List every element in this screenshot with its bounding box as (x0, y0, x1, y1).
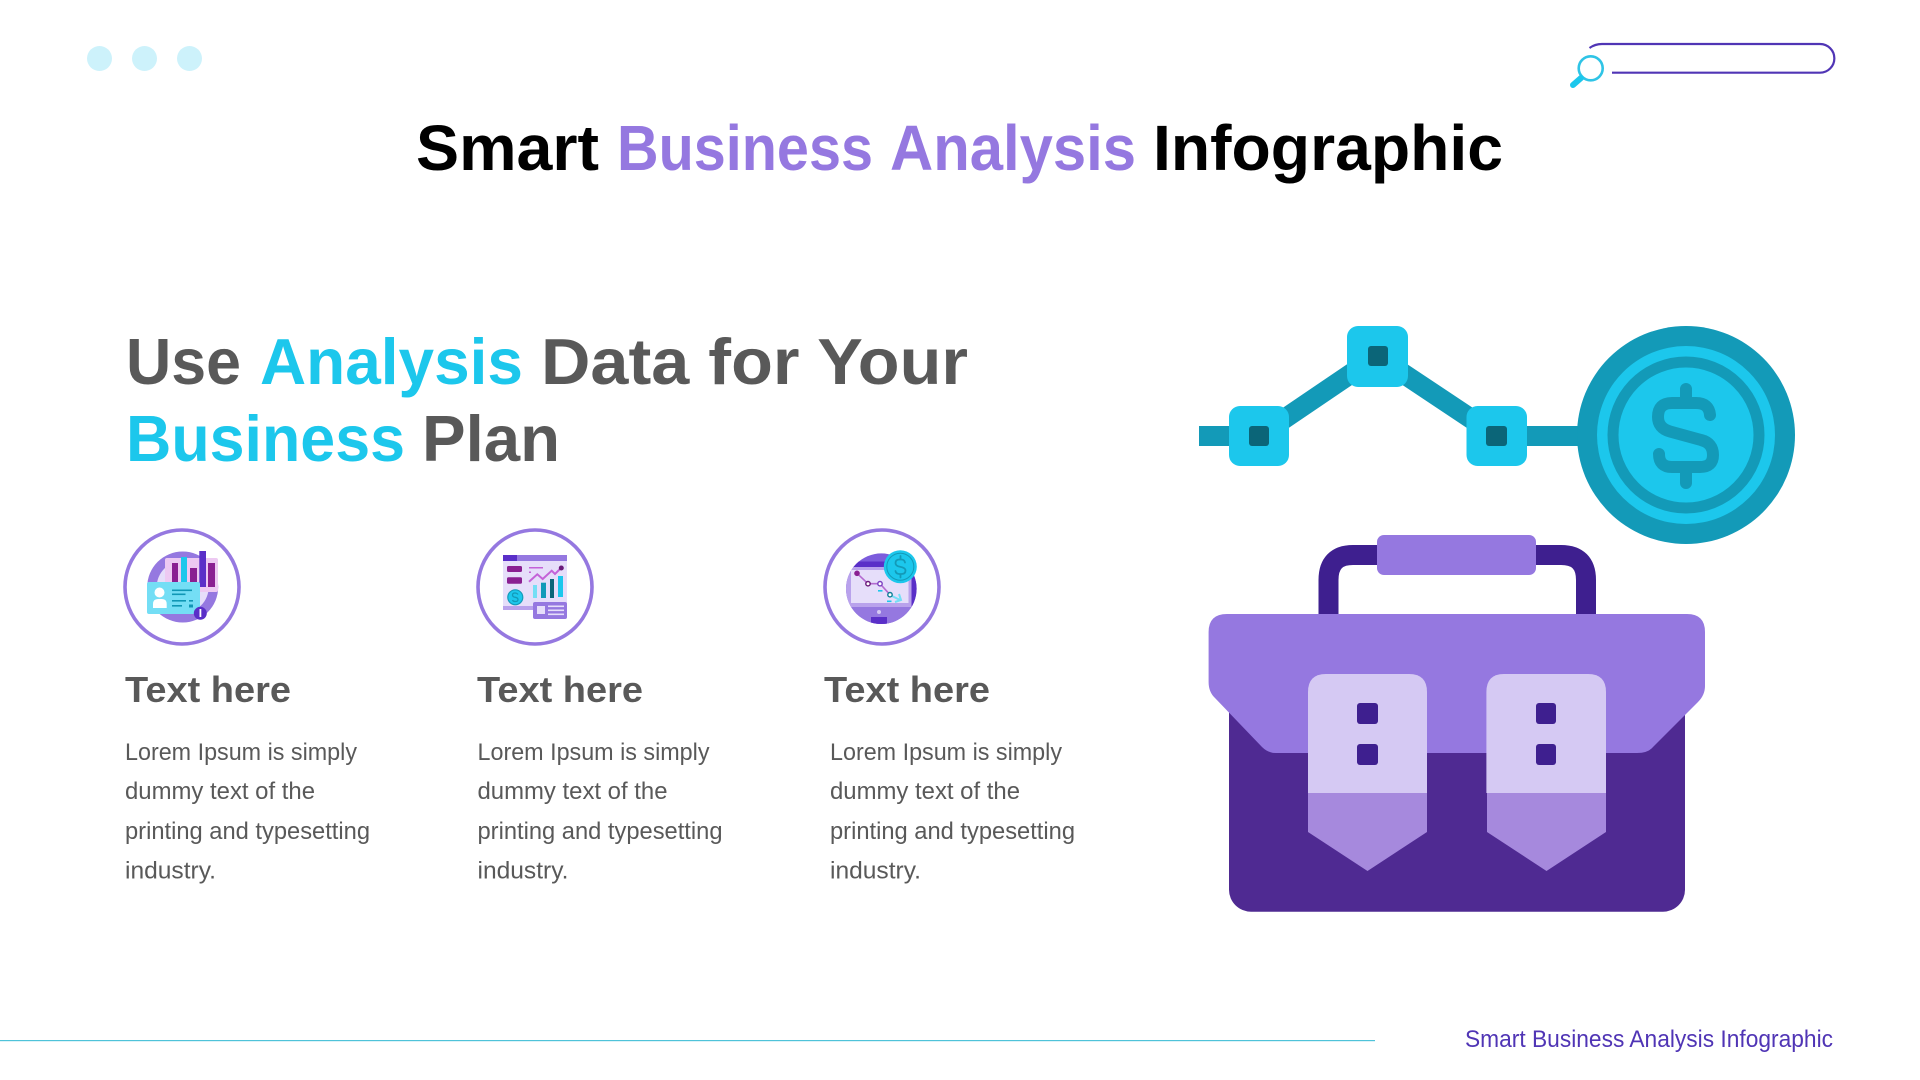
subheading: Text here (824, 669, 990, 710)
illustration: briefcase (1209, 535, 1705, 912)
icon: dollar coin (1577, 326, 1795, 544)
search bar (1573, 44, 1834, 85)
chart node 2 (1347, 326, 1408, 387)
right strap (1486, 674, 1606, 871)
column 1 (125, 530, 370, 884)
briefcase flap (1209, 614, 1705, 753)
icon: id card and bars (125, 530, 239, 644)
heading: Use (126, 325, 241, 398)
chart node 3 (1466, 406, 1527, 466)
body text: industry. (125, 858, 216, 884)
body text: Lorem Ipsum is simply (125, 739, 357, 766)
column 3 (824, 530, 1075, 884)
left strap (1308, 674, 1427, 871)
heading: Plan (422, 402, 560, 475)
briefcase handle (1328, 555, 1586, 620)
chart node 1 (1229, 406, 1289, 466)
subheading: Text here (125, 669, 291, 710)
icon: monitor chart with coin (825, 530, 939, 644)
heading: Business (126, 402, 405, 475)
body text: dummy text of the (125, 778, 315, 805)
body text: dummy text of the (478, 778, 668, 805)
body text (478, 739, 722, 884)
heading: Data for Your (541, 325, 968, 398)
heading: Analysis (260, 325, 523, 398)
body text: printing and typesetting (478, 818, 722, 845)
subheading: Text here (477, 669, 643, 710)
column 2 (477, 530, 722, 884)
body text: industry. (478, 858, 568, 884)
title: Business (617, 112, 873, 184)
icon: magnifier (1573, 56, 1603, 85)
footer text: Smart Business Analysis Infographic (1465, 1026, 1833, 1053)
briefcase body (1229, 690, 1685, 912)
body text: dummy text of the (830, 778, 1020, 805)
title: Smart (416, 112, 599, 184)
body text: printing and typesetting (830, 818, 1075, 845)
window dots (87, 46, 202, 71)
title: Infographic (1153, 112, 1503, 184)
body text: printing and typesetting (125, 818, 370, 845)
title: Analysis (890, 112, 1136, 184)
heading (126, 325, 968, 475)
body text (830, 739, 1075, 884)
body text (125, 739, 370, 884)
illustration: trend line with coin (1199, 326, 1795, 544)
body text: Lorem Ipsum is simply (478, 739, 710, 766)
title (416, 112, 1503, 184)
briefcase grip (1377, 535, 1536, 575)
icon: dashboard report (478, 530, 592, 644)
body text: industry. (830, 858, 921, 884)
body text: Lorem Ipsum is simply (830, 739, 1062, 766)
